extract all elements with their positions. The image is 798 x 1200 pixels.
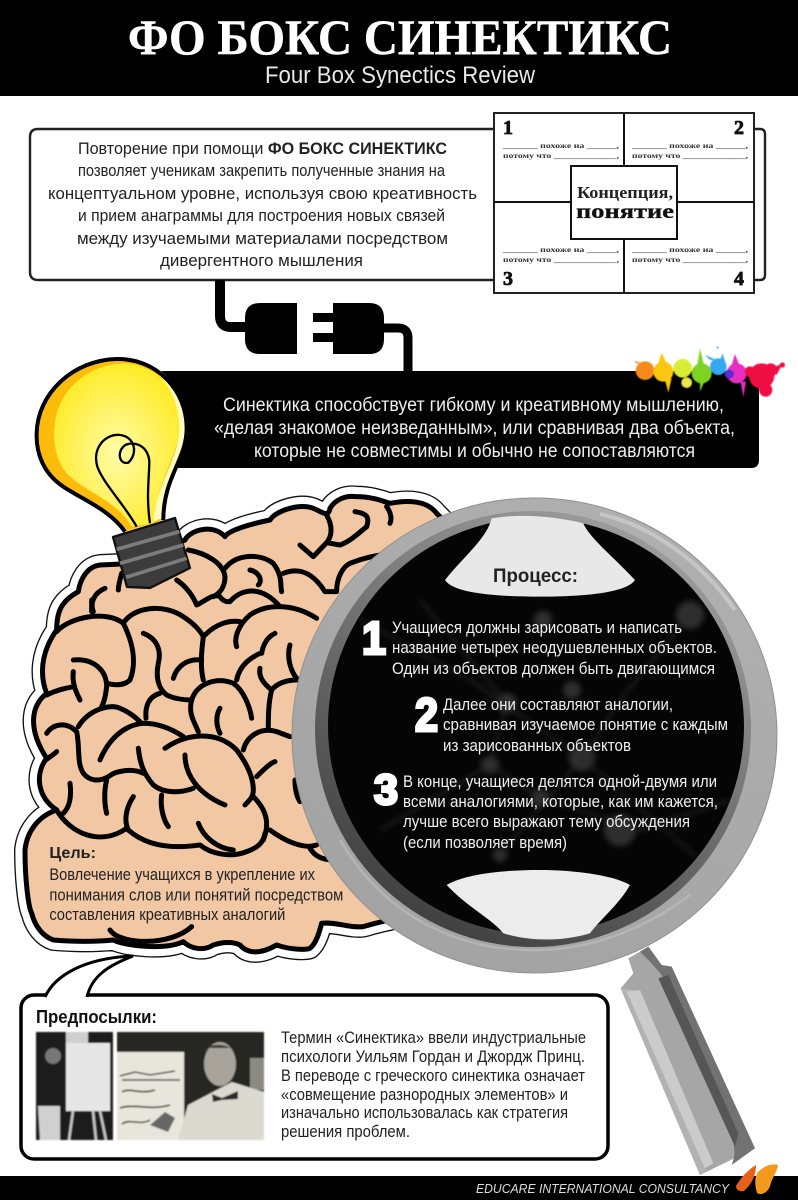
panel: background speech bubble [21,956,608,1159]
box prompts: _______ похоже на ______, [631,141,748,150]
background text: решения проблем. [281,1123,410,1141]
step 3: 3 [374,766,398,814]
brain halo outline [25,496,470,952]
lens inner ring [315,511,751,947]
step 1 [362,612,717,678]
center concept box: Концепция, [577,183,673,202]
brain folds [47,507,391,941]
bulb socket [113,518,190,588]
step 2: сравнивая изучаемое понятие с каждым [443,716,728,734]
box number 3: 3 [503,268,513,290]
background text: «совмещение разнородных элементов» и [281,1086,568,1104]
panel: introduction: и прием анаграммы для построения новых связей [78,207,445,225]
lens top white lamp [445,516,635,940]
step 1: Учащиеся должны зарисовать и написать [392,619,682,637]
photo: presenter with bow tie [117,1032,264,1140]
black band with synectics statement: которые не совместимы и обычно не сопоставляются [254,441,695,462]
box number 4: 4 [734,268,744,290]
step 1: 1 [362,612,386,664]
panel: introduction: между изучаемыми материалами посредством [77,230,448,248]
four box diagram [494,113,765,293]
panel: introduction: концептуальном уровне, используя свою креативность [48,185,477,203]
black band with synectics statement: Синектика способствует гибкому и креативному мышлению, [223,395,724,416]
lens dark background [328,518,744,934]
step 3: (если позволяет время) [403,834,567,852]
icon: consultancy logo [736,1164,778,1194]
magnifying glass handle [621,947,755,1175]
box number 1: 1 [503,117,513,139]
goal text [49,866,343,924]
footer band [0,1164,798,1200]
icon: electric plug [220,280,408,373]
panel: process magnifying lens [292,498,777,973]
photo: presenter at flipchart [36,1032,113,1140]
goal text: понимания слов или понятий посредством [49,887,343,905]
background text: В переводе с греческого синектика означает [281,1067,585,1085]
box number 2: 2 [734,117,744,139]
black band with synectics statement: «делая знакомое неизведанным», или сравнивая два объекта, [214,418,735,439]
box prompts: потому что _____________, [503,255,619,264]
title: ФО БОКС СИНЕКТИКС [128,9,672,65]
brain illustration [25,496,470,952]
step 2: из зарисованных объектов [443,737,631,755]
neuron background texture [360,600,730,862]
bulb filament [96,435,150,527]
center concept box [571,166,677,239]
box prompts: _______ похоже на ______, [502,141,619,150]
goal text: составления креативных аналогий [49,906,285,924]
step 1: Один из объектов должен быть двигающимся [392,660,715,678]
box prompts: потому что _____________, [632,255,748,264]
box prompts: потому что _____________, [503,151,619,160]
goal text: Вовлечение учащихся в укрепление их [49,866,315,884]
box prompts: _______ похоже на ______, [502,245,619,254]
goal heading: Цель: [49,845,96,862]
step 2 [415,688,728,755]
footer band: EDUCARE INTERNATIONAL CONSULTANCY [476,1182,731,1196]
icon: paint splash [633,347,785,397]
panel: introduction: дивергентного мышления [160,252,363,270]
box prompts [502,141,748,264]
lower outer folds [110,830,333,941]
black band with synectics statement [150,371,759,468]
header band [0,0,798,96]
panel: introduction: Повторение при помощи ФО БОКС СИНЕКТИКС [78,140,447,158]
background text: Термин «Синектика» ввели индустриальные [281,1029,586,1047]
step 2: 2 [415,688,438,741]
process heading: Процесс: [493,566,578,587]
icon: light bulb [37,359,190,588]
lens bottom white lamp [447,870,630,940]
box prompts: _______ похоже на ______, [631,245,748,254]
step 3: лучше всего выражают тему обсуждения [403,813,690,831]
panel: introduction [30,129,494,280]
step 3: В конце, учащиеся делятся одной-двумя или [403,773,717,791]
central folds [47,600,317,850]
center concept box: понятие [576,199,674,223]
panel: introduction: позволяет ученикам закрепить полученные знания на [78,162,446,180]
step 3: всеми аналогиями, которые, как им кажется, [403,793,718,811]
brain body [25,496,470,952]
background text: изначально использовалась как стратегия [281,1104,568,1122]
upper folds [92,507,391,612]
box prompts: потому что _____________, [632,151,748,160]
step 1: название четырех неодушевленных объектов. [392,639,717,657]
subtitle: Four Box Synectics Review [265,62,536,89]
background heading: Предпосылки: [36,1007,157,1027]
background text [281,1029,586,1141]
step 3 [374,766,718,852]
step 2: Далее они составляют аналогии, [443,696,673,714]
lens outer ring [292,498,777,973]
background text: психологи Уильям Гордан и Джордж Принц. [281,1048,585,1066]
